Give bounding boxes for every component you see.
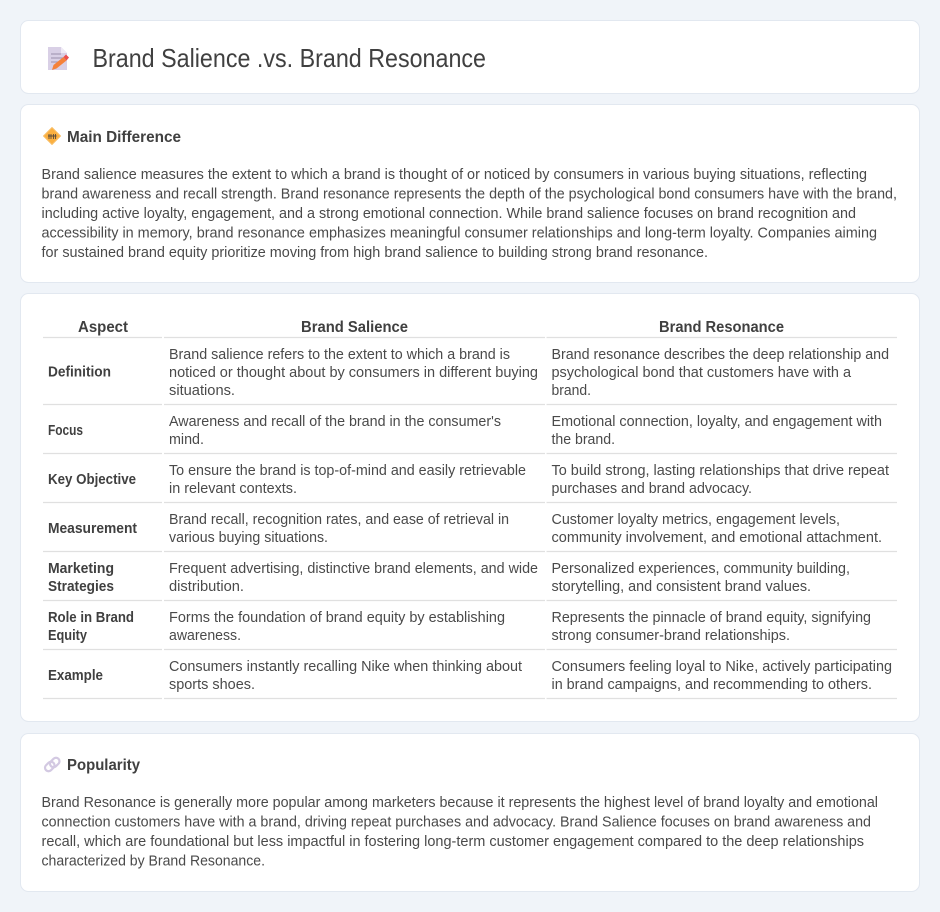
row: focus: the brand. [552,432,615,448]
table header row [78,319,784,336]
row: example: Example [48,668,103,684]
row: focus: Focus [48,423,83,439]
row: measurement: Customer loyalty metrics, engagement levels, [552,512,840,528]
row: marketing strategies: Marketing [48,561,114,577]
row: definition: noticed or thought about by consumers in different buying [169,365,538,381]
row: focus: Awareness and recall of the brand in the consumer's [169,414,501,430]
table header row: Aspect [78,319,129,336]
row: marketing strategies: Frequent advertising, distinctive brand elements, and wide [169,561,538,577]
panel: comparison table [20,294,920,722]
row: focus: Emotional connection, loyalty, and engagement with [552,414,882,430]
row: definition: Definition [48,364,111,380]
row: marketing strategies: Personalized experiences, community building, [552,561,850,577]
row: focus [48,414,882,448]
row: example: Consumers feeling loyal to Nike, actively participating [552,659,892,675]
panel: title header [20,20,920,94]
text block: main difference paragraph: accessibility in memory, brand resonance emphasizes meaningful consumer relationships and long-term loyalty. Companies aiming [42,226,877,242]
text block: main difference paragraph: including active loyalty, engagement, and a strong emotional connection. While brand salience focuses on brand recognition and [42,206,856,222]
table header row: Brand Resonance [659,319,784,336]
row: key objective [48,463,889,497]
row: role in brand equity: Represents the pinnacle of brand equity, signifying [552,610,871,626]
row: measurement: various buying situations. [169,530,328,546]
panel: main difference [20,104,920,282]
row: role in brand equity: strong consumer-brand relationships. [552,628,790,644]
icon: diamond sign [44,128,60,144]
row: marketing strategies: storytelling, and consistent brand values. [552,579,811,595]
row: role in brand equity: awareness. [169,628,241,644]
text block: popularity paragraph: recall, which are foundational but less impactful in fostering long-term customer engagement compared to the deep relationships [42,834,864,850]
row: marketing strategies: Strategies [48,579,114,595]
text block: popularity paragraph [42,795,878,870]
text block: main difference paragraph [42,167,897,261]
row: measurement: community involvement, and emotional attachment. [552,530,882,546]
row: role in brand equity [48,610,871,644]
text block: popularity paragraph: connection customers have with a brand, driving repeat purchases and advocacy. Brand Salience focuses on brand awareness and [42,814,871,830]
row: measurement [48,512,882,546]
row: key objective: To ensure the brand is top-of-mind and easily retrievable [169,463,526,479]
row: marketing strategies [48,561,850,595]
text block: main difference paragraph: brand awareness and recall strength. Brand resonance represents the depth of the psychological bond consumers have with the brand, [42,186,897,202]
row: key objective: To build strong, lasting relationships that drive repeat [552,463,889,479]
text block: main difference paragraph: for sustained brand equity prioritize moving from high brand salience to building strong brand resonance. [42,245,708,261]
row: role in brand equity: Equity [48,628,87,644]
row: role in brand equity: Forms the foundation of brand equity by establishing [169,610,505,626]
row: definition: brand. [552,383,591,399]
text block: popularity paragraph: characterized by Brand Resonance. [42,854,265,870]
row: measurement: Brand recall, recognition rates, and ease of retrieval in [169,512,509,528]
row: key objective: in relevant contexts. [169,481,297,497]
row: definition: Brand salience refers to the extent to which a brand is [169,347,510,363]
row: definition: psychological bond that customers have with a [552,365,851,381]
row: focus: mind. [169,432,204,448]
heading: main difference: Main Difference [67,129,181,146]
row: example [48,659,892,693]
panel: popularity [20,734,920,892]
row: definition [48,347,889,399]
row: measurement: Measurement [48,521,137,537]
row: definition: Brand resonance describes the deep relationship and [552,347,889,363]
row: role in brand equity: Role in Brand [48,610,134,626]
row: example: Consumers instantly recalling Nike when thinking about [169,659,522,675]
row: key objective: Key Objective [48,472,136,488]
icon: document with pencil [48,47,69,70]
row: key objective: purchases and brand advocacy. [552,481,752,497]
title: Brand Salience .vs. Brand Resonance [92,45,486,73]
text block: main difference paragraph: Brand salience measures the extent to which a brand is thought of or noticed by consumers in various buying situations, reflecting [42,167,867,183]
row: example: in brand campaigns, and recommending to others. [552,677,872,693]
text block: popularity paragraph: Brand Resonance is generally more popular among marketers because it represents the highest level of brand loyalty and emotional [42,795,878,811]
heading: popularity: Popularity [67,757,140,774]
row: example: sports shoes. [169,677,255,693]
icon: link [44,756,61,773]
row: marketing strategies: distribution. [169,579,244,595]
row: definition: situations. [169,383,235,399]
table header row: Brand Salience [301,319,408,336]
